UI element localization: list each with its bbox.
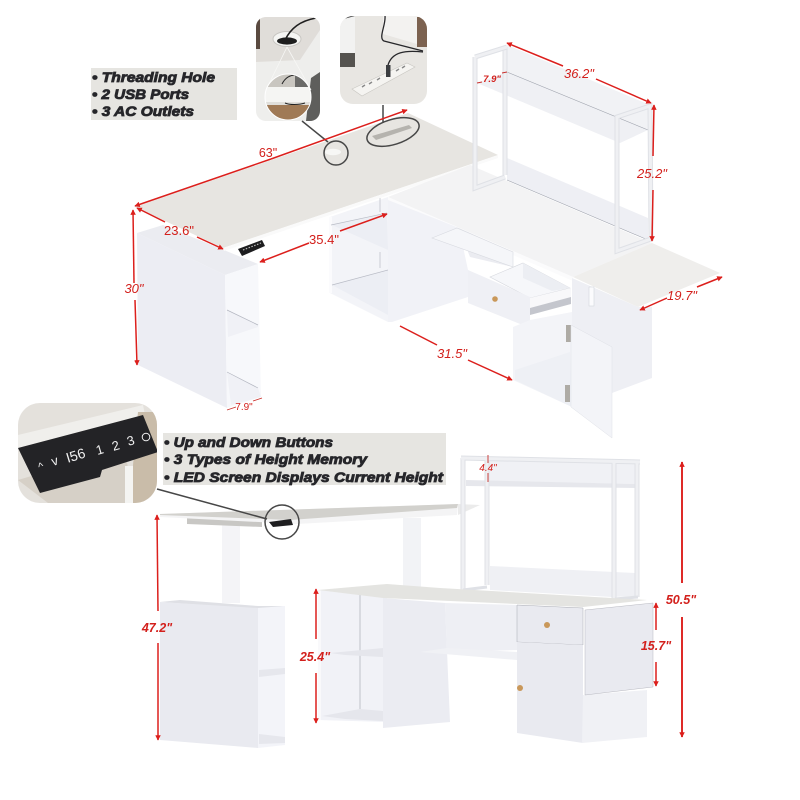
dimension: desk length 63 in	[135, 110, 407, 206]
right return unit	[388, 165, 652, 322]
desk 2: front view	[160, 457, 653, 748]
dimension: 4.4 in: 4.4"	[479, 463, 497, 474]
left pedestal front view	[160, 600, 285, 748]
inset circle	[266, 74, 310, 120]
control box front view	[269, 519, 293, 527]
text: threading hole: • Threading Hole	[92, 69, 215, 85]
hutch	[475, 45, 651, 251]
upright panel	[383, 598, 450, 728]
panel: threading hole feature list	[91, 68, 237, 120]
grommet hole	[325, 149, 341, 155]
main desktop	[135, 113, 498, 248]
dimension: 47.2 in: 47.2"	[141, 621, 173, 635]
panel: control panel closeup	[18, 403, 158, 503]
open bay	[420, 603, 517, 660]
cabinet door	[571, 325, 612, 438]
dimension: 19.7 in: 19.7"	[667, 288, 698, 303]
dimension: height 30 in: 30"	[124, 281, 145, 296]
control panel labels: 2	[110, 437, 121, 454]
keyboard tray	[432, 228, 513, 275]
dimension: hutch height 25.2 in: 25.2"	[636, 166, 668, 181]
cabinet lower	[582, 690, 647, 743]
lower desktop surface	[318, 584, 647, 607]
control panel labels: I56	[64, 445, 87, 466]
photo: threading hole closeup	[256, 17, 320, 121]
dimension: pedestal depth 7.9 in: 7.9"	[235, 402, 253, 413]
cabinet interior	[513, 312, 572, 407]
callout lines: top	[302, 105, 422, 165]
text: AC outlets: • 3 AC Outlets	[92, 103, 194, 119]
desktop front view	[160, 504, 458, 524]
dimension: leg gap 35.4 in	[260, 214, 387, 262]
dimension: desk depth 23.6 in: 23.6"	[164, 223, 194, 238]
text: up and down: • Up and Down Buttons	[164, 434, 333, 450]
text: height memory: • 3 Types of Height Memory	[164, 451, 368, 467]
callout line: bottom	[157, 489, 299, 539]
dimension: hutch depth 7.9 in: 7.9"	[483, 74, 501, 85]
hutch front view	[461, 457, 640, 600]
control panel labels	[38, 432, 150, 468]
middle open shelves	[329, 197, 388, 322]
middle shelves front view	[318, 590, 387, 722]
dimension: leg gap 35.4 in: 35.4"	[309, 232, 339, 247]
control panel labels: v	[49, 452, 60, 469]
dimension: 15.7 in	[641, 603, 672, 686]
open door	[585, 603, 653, 695]
left pedestal	[137, 225, 261, 408]
photo: power strip closeup	[340, 16, 427, 104]
handle strip	[589, 287, 594, 306]
drawer	[468, 263, 571, 328]
control panel labels: 1	[94, 441, 105, 458]
wing desktop	[573, 243, 720, 307]
dimension: 31.5 in: 31.5"	[437, 346, 468, 361]
dimension: 15.7 in: 15.7"	[641, 639, 672, 653]
drawer front view	[517, 605, 583, 645]
door front view	[517, 642, 583, 743]
dimension: 25.4 in: 25.4"	[299, 650, 331, 664]
outlet strip	[372, 125, 412, 140]
panel: height controls feature list	[163, 433, 446, 485]
dimension: hutch depth 7.9 in	[477, 72, 507, 85]
text: USB ports: • 2 USB Ports	[92, 86, 189, 102]
text: LED: • LED Screen Displays Current Height	[164, 469, 444, 485]
dimension: 25.4 in	[299, 589, 331, 723]
dimension: 4.4 in	[479, 455, 497, 482]
desk 1: isometric view	[135, 45, 720, 438]
dimension: 19.7 in	[640, 277, 722, 310]
dimension: 50.5 in: 50.5"	[666, 593, 697, 607]
dimension: pedestal depth 7.9 in	[227, 398, 262, 413]
control panel	[238, 240, 265, 256]
dimension: hutch width 36.2 in	[507, 43, 651, 103]
dimension: desk depth 23.6 in	[137, 208, 223, 249]
dimension: desk length 63 in: 63"	[259, 146, 277, 160]
dimension: 31.5 in	[400, 326, 512, 380]
cabinet side	[572, 278, 652, 393]
control panel labels: ^	[37, 460, 46, 474]
dimension: hutch width 36.2 in: 36.2"	[564, 66, 595, 81]
right lift column	[403, 518, 421, 593]
control panel labels: 3	[125, 432, 136, 449]
under-desk frame	[187, 518, 262, 527]
left lift column	[222, 524, 240, 603]
dimension: hutch height 25.2 in	[636, 105, 668, 241]
